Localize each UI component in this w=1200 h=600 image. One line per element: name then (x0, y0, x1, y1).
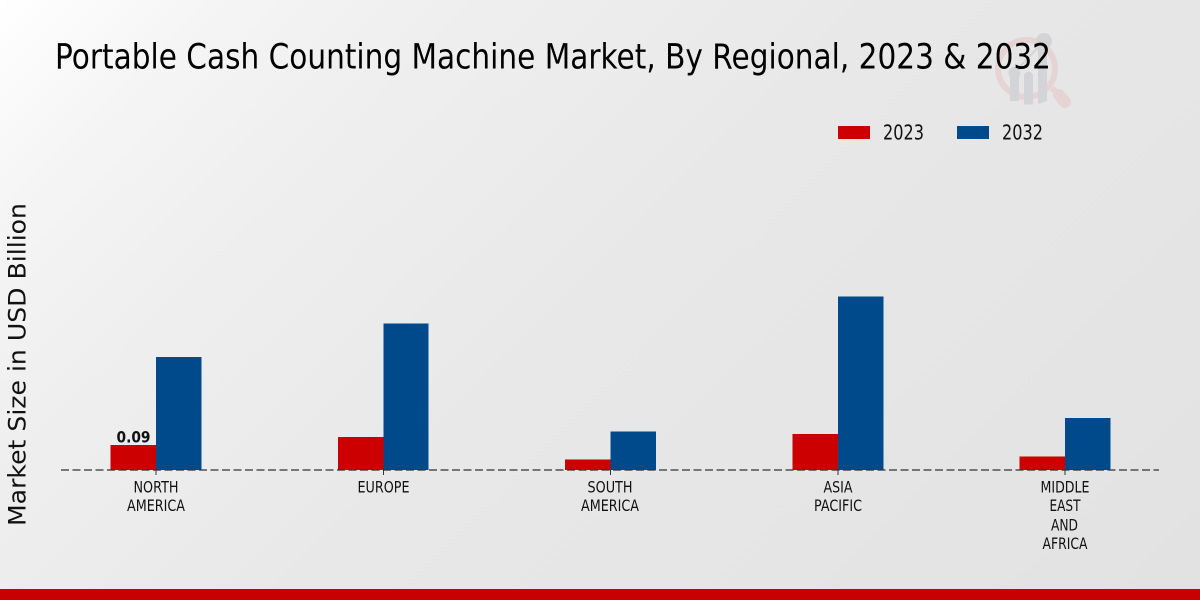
x label: South America: AMERICA (581, 496, 639, 515)
x label: South America: SOUTH (588, 478, 632, 496)
x label: South America (581, 478, 639, 515)
x label: Middle East and Africa: AFRICA (1042, 534, 1088, 553)
bars: Europe (338, 324, 428, 470)
bars: Asia Pacific (792, 296, 884, 470)
x label: Middle East and Africa: EAST (1050, 496, 1081, 515)
x label: Middle East and Africa: MIDDLE (1040, 478, 1090, 496)
y axis label: Market Size in USD Billion (4, 203, 32, 526)
bar chart (61, 296, 1159, 475)
x label: Middle East and Africa (1040, 478, 1090, 553)
x label: Middle East and Africa: AND (1051, 516, 1078, 534)
x label: Europe: EUROPE (358, 478, 410, 496)
x label: Asia Pacific (814, 478, 862, 515)
legend (838, 120, 1043, 144)
x label: North America: NORTH (134, 478, 178, 496)
x label: North America (127, 478, 185, 515)
legend item: 2023: 2023 (883, 120, 924, 144)
bars: South America (565, 432, 656, 470)
x label: Asia Pacific: ASIA (824, 478, 853, 496)
legend item: 2023 (838, 120, 924, 144)
bars: North America (110, 357, 202, 470)
footer bar (0, 589, 1200, 600)
data label: 0.09: 0.09 (116, 428, 150, 446)
icon: watermark logo (998, 33, 1065, 104)
x label: Asia Pacific: PACIFIC (814, 496, 862, 515)
legend item: 2032: 2032 (1002, 120, 1043, 144)
bars: Middle East and Africa (1020, 418, 1110, 470)
x label: North America: AMERICA (127, 496, 185, 515)
title: Portable Cash Counting Machine Market, By Regional, 2023 & 2032 (55, 38, 1051, 78)
legend item: 2032 (957, 120, 1043, 144)
